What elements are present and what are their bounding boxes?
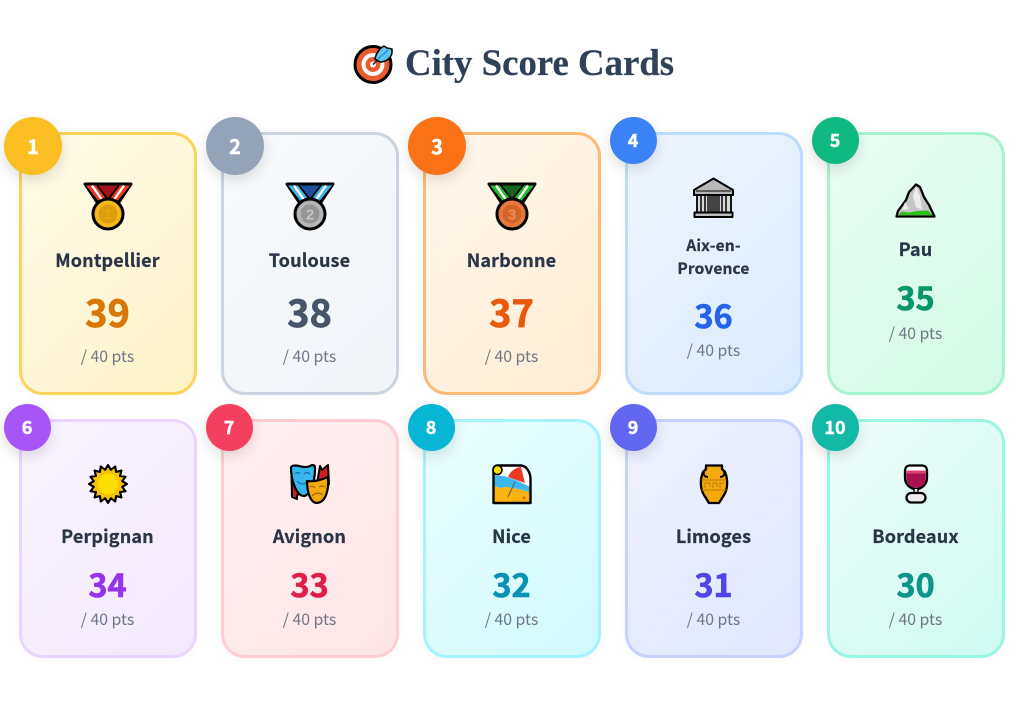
points label: / 40 pts: [283, 344, 336, 366]
card background: [19, 132, 196, 395]
rank badge 3: [408, 117, 466, 175]
panel: Avignon card: [202, 404, 399, 658]
rank badge 9: [610, 404, 656, 451]
card background: [19, 419, 196, 658]
rank badge 2: 2: [229, 131, 241, 160]
icon: bronze medal: [487, 182, 536, 230]
rank badge 6: [4, 404, 50, 451]
panel: Perpignan card: [0, 404, 197, 658]
rank badge 1: [4, 117, 62, 175]
rank badge 7: [206, 404, 252, 451]
icon: wine glass: [904, 464, 928, 504]
card background: [221, 419, 398, 658]
rank badge 5: [812, 117, 858, 164]
card background: [423, 132, 600, 395]
points label: / 40 pts: [889, 320, 942, 344]
city name: Montpellier: [55, 247, 160, 273]
score: 32: [492, 560, 531, 607]
points label: / 40 pts: [81, 344, 134, 366]
rank badge 6: 6: [22, 414, 32, 440]
icon: silver medal: [285, 182, 334, 230]
rank badge 4: 4: [628, 127, 638, 153]
card background: [423, 419, 600, 658]
panel: Aix-en-Provence card: [606, 117, 803, 395]
city name: Pau: [899, 236, 932, 262]
rank badge 5: 5: [830, 127, 840, 153]
rank badge 10: [812, 404, 858, 451]
rank badge 4: [610, 117, 656, 164]
rank badge 8: [408, 404, 454, 451]
city name: Toulouse: [269, 247, 350, 273]
rank badge 9: 9: [628, 414, 638, 440]
rank badge 8: 8: [426, 414, 436, 440]
city name: Narbonne: [467, 247, 556, 273]
icon: silver medal: 2: [306, 206, 314, 224]
rank badge 7: 7: [224, 414, 234, 440]
points label: / 40 pts: [889, 606, 942, 630]
icon: bronze medal: 3: [508, 206, 516, 224]
city name: Avignon: [273, 523, 346, 549]
points label: / 40 pts: [485, 606, 538, 630]
icon: gold medal: [83, 182, 132, 230]
icon: amphora: [700, 464, 728, 504]
points label: / 40 pts: [687, 338, 740, 360]
city name: Nice: [492, 523, 531, 549]
city name: Aix-en-: [686, 234, 741, 256]
card background: [625, 132, 802, 395]
city name: Provence: [677, 256, 750, 278]
city name: Bordeaux: [872, 523, 959, 549]
card background: [827, 419, 1004, 658]
panel: Toulouse card: [202, 117, 399, 395]
panel: Pau card: [808, 117, 1005, 395]
score: 36: [694, 290, 733, 338]
icon: classical building: [693, 178, 734, 218]
rank badge 2: [206, 117, 264, 175]
panel: Narbonne card: [404, 117, 601, 395]
points label: / 40 pts: [81, 606, 134, 630]
icon: performing arts masks: [290, 464, 330, 504]
icon: mountain: [895, 183, 936, 218]
card background: [221, 132, 398, 395]
panel: Montpellier card: [0, 117, 197, 395]
score: 37: [489, 282, 534, 338]
icon: sun: [88, 464, 128, 504]
score: 30: [896, 560, 935, 607]
icon: beach with umbrella: [492, 464, 532, 504]
score: 38: [287, 282, 332, 338]
city name: Perpignan: [61, 523, 154, 549]
points label: / 40 pts: [283, 606, 336, 630]
card background: [827, 132, 1004, 395]
city name: [677, 234, 750, 278]
rank badge 10: 10: [824, 414, 846, 440]
icon: target with dart: [354, 45, 393, 84]
icon: gold medal: 1: [104, 206, 112, 222]
card background: [625, 419, 802, 658]
rank badge 1: 1: [27, 131, 39, 160]
panel: Nice card: [404, 404, 601, 658]
points label: / 40 pts: [485, 344, 538, 366]
panel: Limoges card: [606, 404, 803, 658]
title: [354, 42, 674, 84]
heading text: City Score Cards: [405, 42, 674, 83]
points label: / 40 pts: [687, 606, 740, 630]
city name: Limoges: [676, 523, 751, 549]
score: 35: [896, 272, 935, 320]
panel: Bordeaux card: [808, 404, 1005, 658]
score: 31: [694, 560, 733, 607]
rank badge 3: 3: [431, 131, 443, 160]
score: 39: [85, 282, 130, 338]
score: 33: [290, 560, 329, 607]
score: 34: [88, 560, 127, 607]
